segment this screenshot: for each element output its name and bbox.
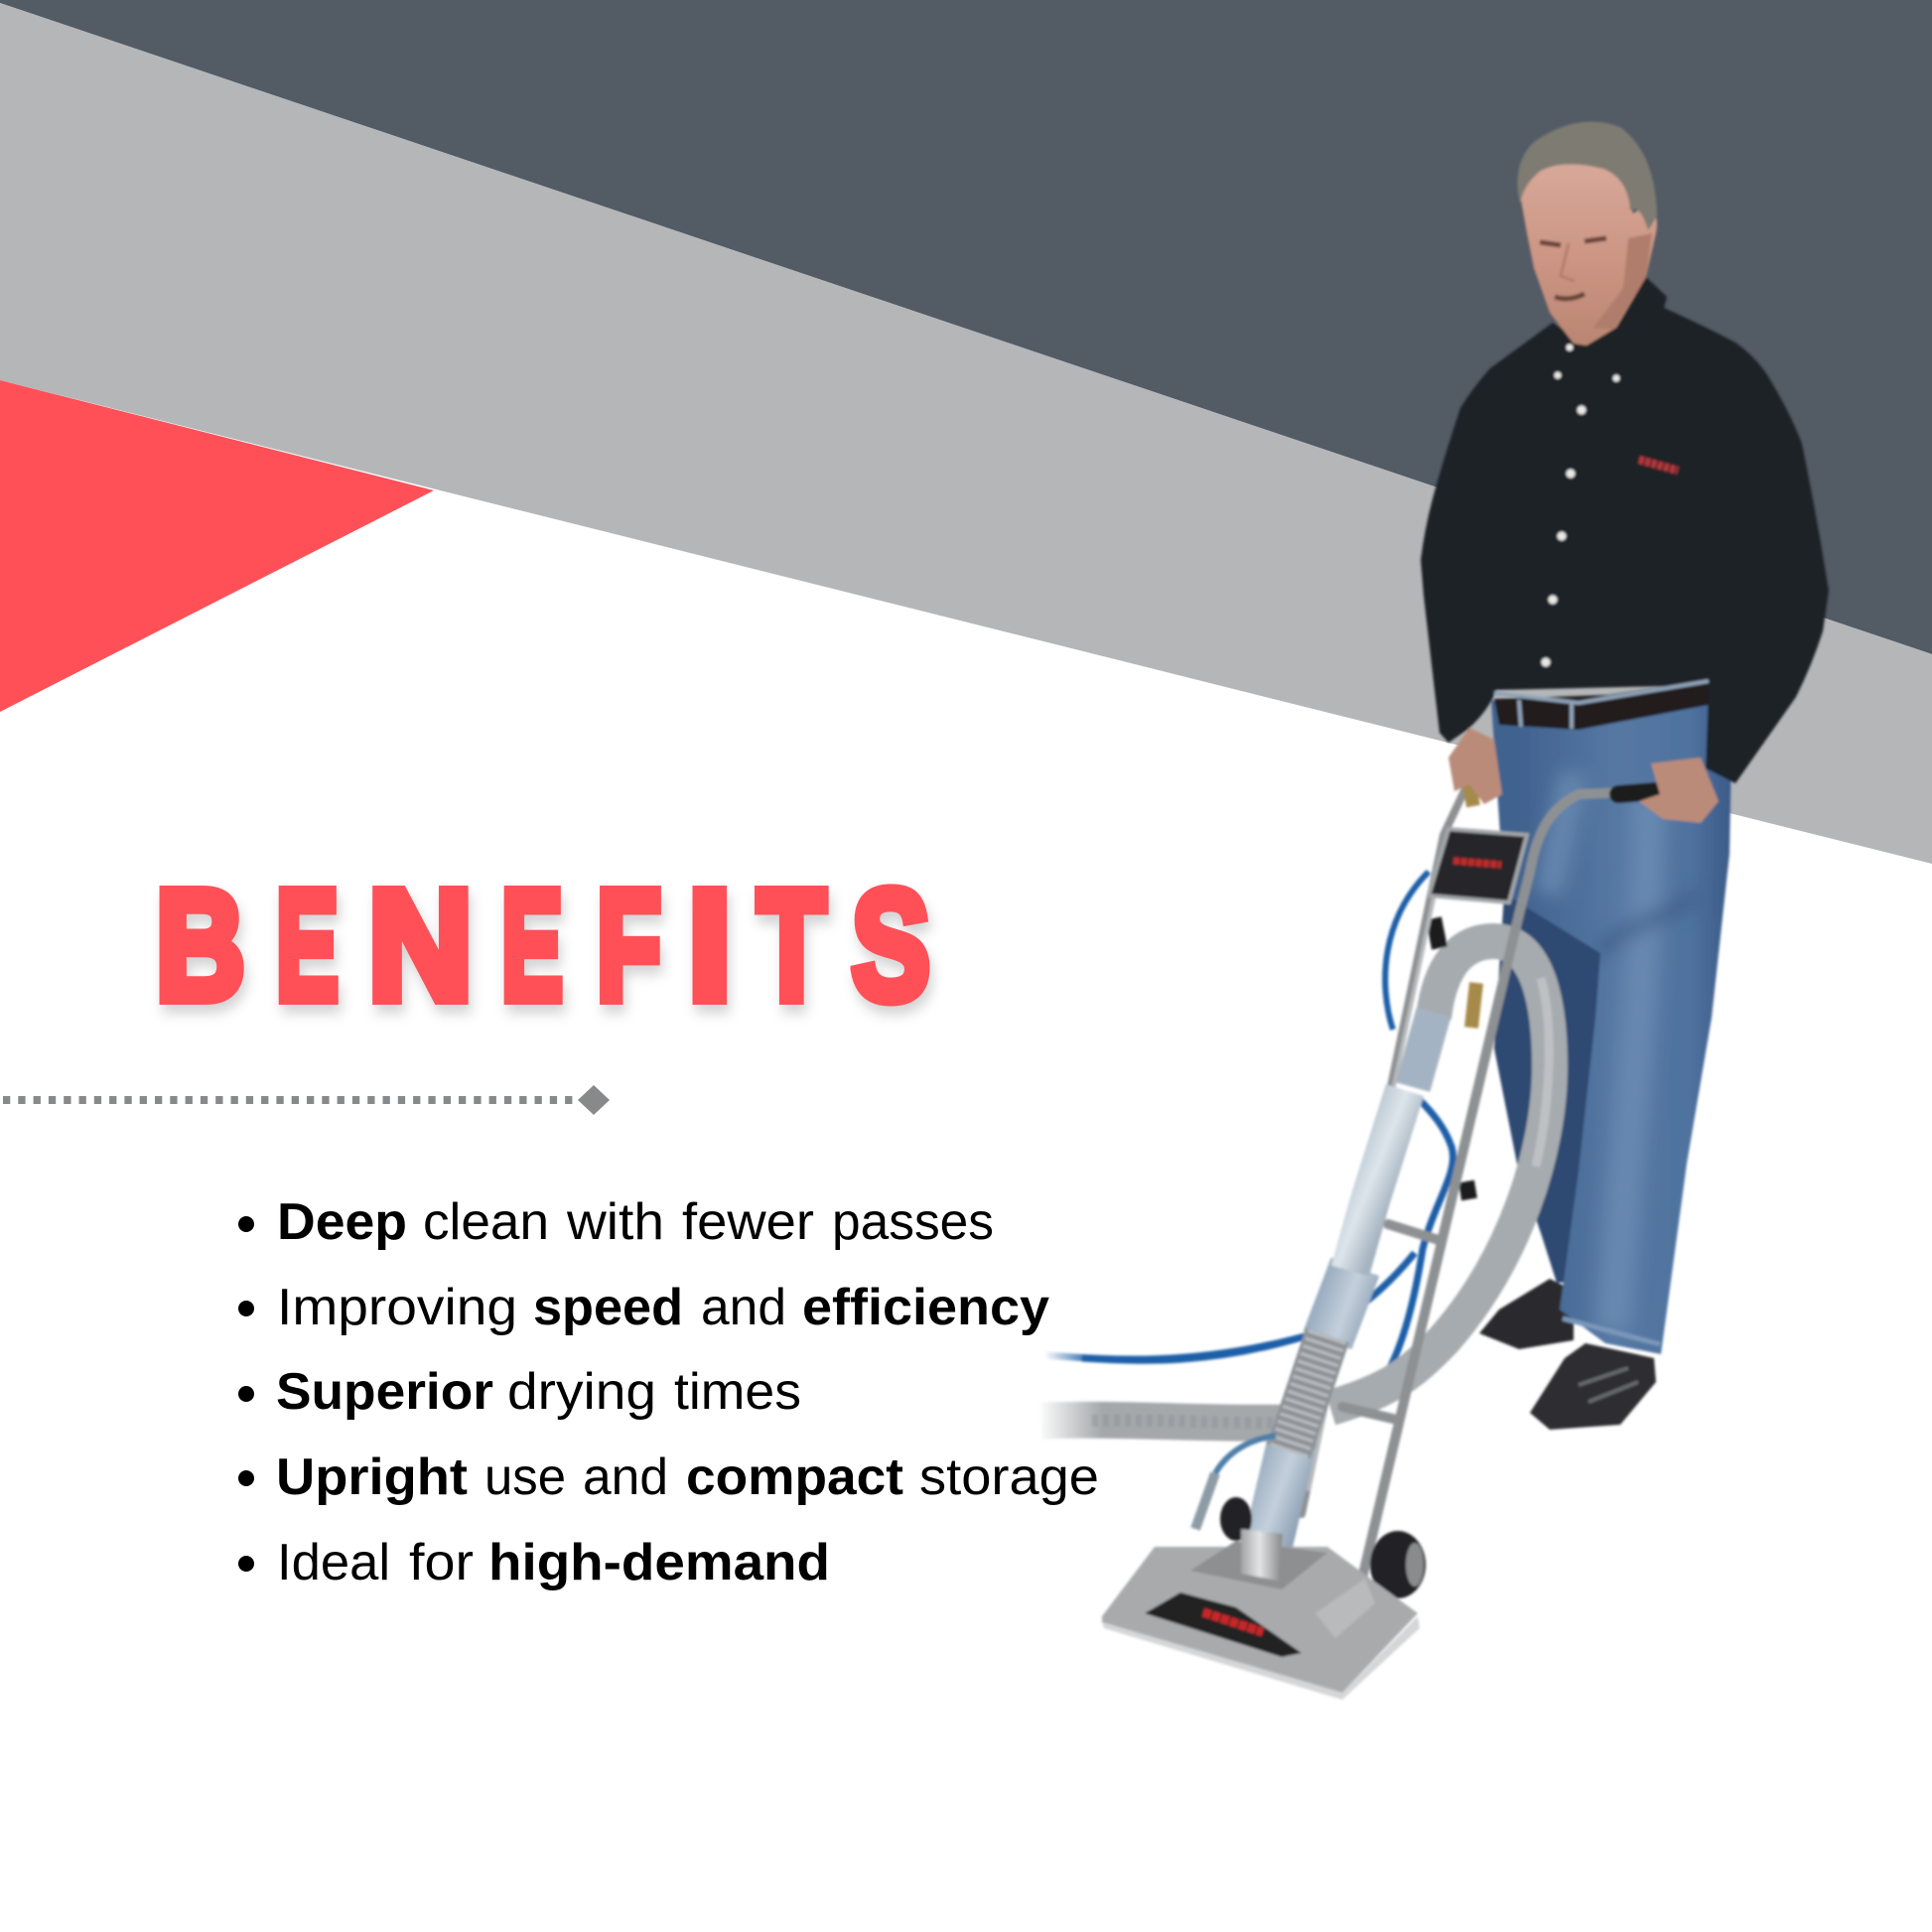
bullet line 4 [238,1449,1099,1506]
black clamp and knob [1434,918,1469,1199]
steel stem [1241,1529,1283,1581]
title: B [155,859,244,1033]
bullet line 3: Superior [276,1363,493,1421]
hose connector [1195,1473,1215,1529]
bullet line 1 [238,1193,994,1251]
head: face and neck [1519,149,1657,345]
wand lower tube [1267,1444,1292,1549]
hose coupler [1413,1013,1434,1087]
bullet line 2: speed [533,1279,683,1336]
panel logo [1453,861,1501,865]
title: F [597,859,660,1033]
wand corrugated grip [1289,1335,1327,1451]
bullet line 3: times [674,1363,801,1421]
label logo [1203,1612,1263,1632]
wand frame rails [1302,784,1623,1579]
bullet line 2: efficiency [802,1279,1049,1336]
belt [1494,679,1709,730]
side latch [1315,1579,1375,1638]
bullet line 5: Ideal [277,1534,390,1591]
photo: man with upright carpet cleaning wand [1043,121,1831,1700]
bullet line 2: and [701,1279,786,1336]
title: E [276,859,338,1033]
bullet line 4: Upright [276,1449,468,1506]
bullet line 4: use [484,1449,566,1506]
wand blue sleeve [1327,1267,1355,1340]
shirt logo [1639,460,1678,471]
shoes [1479,1279,1656,1430]
control panel on wand [1429,829,1527,902]
shirt [1421,277,1829,783]
title: I [688,859,732,1033]
bullet line 1: Deep [277,1193,407,1251]
jeans front leg and hips [1491,695,1732,1354]
bullet line 3 [238,1363,801,1421]
bullet line 1: passes [832,1193,994,1251]
bullet line 1: with [566,1193,664,1251]
neck shading [1593,233,1652,330]
title [155,859,937,1033]
handle grip [1618,791,1656,794]
title: N [368,859,473,1033]
title: E [501,859,562,1033]
belt buckle and loops [1494,681,1709,729]
bullet line 2: Improving [277,1279,517,1336]
eyes and mouth [1540,238,1606,299]
bullet line 4: storage [919,1449,1099,1506]
hair [1517,122,1657,230]
rear wheels [1220,1497,1426,1598]
gray vacuum hose [1041,941,1550,1423]
bullet line 3: drying [507,1363,656,1421]
wand upper tube [1350,1090,1405,1271]
title: T [758,859,826,1033]
bullet line 5 [238,1534,830,1591]
blue hose over wand [1215,1436,1276,1473]
bullet line 5: for [409,1534,474,1591]
nose [1561,243,1575,281]
brass fitting [1467,774,1476,1028]
base top plate [1190,1541,1327,1589]
black label on head [1145,1592,1302,1657]
shirt buttons [1541,344,1620,667]
bullet line 1: clean [423,1193,549,1251]
hands [1449,728,1719,823]
cleaning head base [1102,1547,1418,1693]
title: S [852,859,930,1033]
jeans back leg [1494,794,1638,1283]
bullet line 1: fewer [682,1193,814,1251]
bullet line 4: and [583,1449,668,1506]
blue hose, rear sections [1044,872,1453,1401]
bullet line 2 [238,1279,1049,1336]
bullet line 4: compact [686,1449,903,1506]
bullet line 5: high-demand [488,1534,830,1591]
